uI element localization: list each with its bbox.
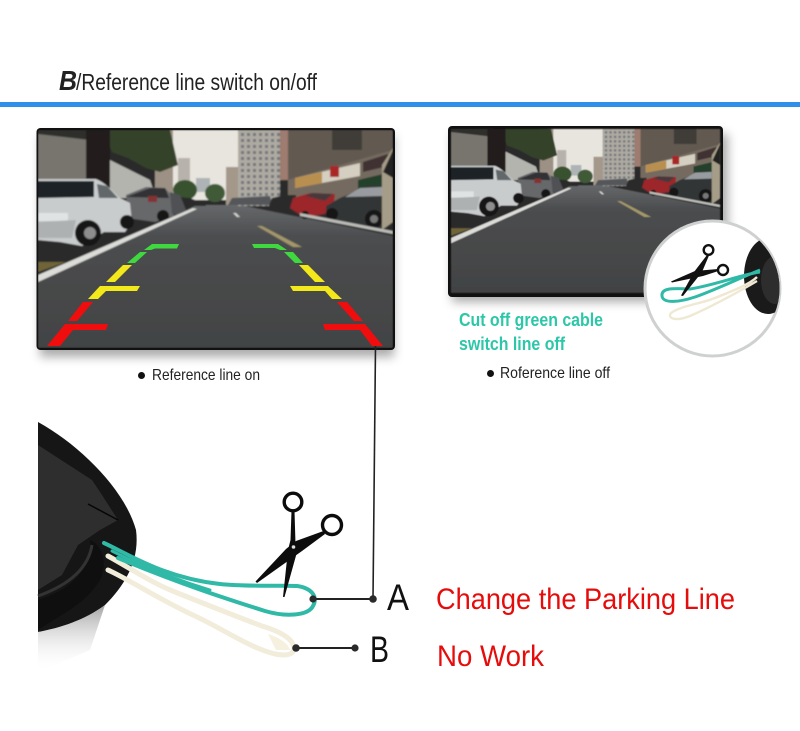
camera body: [38, 422, 137, 672]
caption: reference line off: Roference line off: [500, 365, 610, 382]
title: /Reference line switch on/off: [76, 69, 318, 95]
connector: B line: [292, 644, 359, 652]
label A: A: [387, 577, 409, 618]
connector: A line up to photo: [309, 346, 377, 603]
panel: reference line on photo: [36, 128, 395, 357]
cut off green cable note: Cut off green cable: [459, 310, 603, 330]
parking guide lines: [47, 244, 383, 346]
panel: reference line off photo: [448, 126, 728, 302]
cut off green cable note: [459, 310, 603, 354]
text: change the parking line: Change the Parking Line: [436, 583, 735, 616]
title: [59, 65, 318, 96]
reflection: [38, 605, 105, 672]
header rule: [0, 102, 800, 107]
green wire A: [104, 543, 315, 615]
text: no work: No Work: [437, 640, 545, 673]
icon: scissors: [256, 493, 342, 597]
inset circle: cut cable detail: [645, 221, 792, 356]
cut off green cable note: switch line off: [459, 334, 566, 354]
icon: small scissors: [671, 245, 728, 296]
caption: reference line on: Reference line on: [152, 367, 260, 384]
white wire B: [108, 556, 294, 655]
label B: B: [370, 629, 389, 670]
panel: camera cable photo: [38, 422, 342, 672]
title: B: [59, 65, 77, 96]
